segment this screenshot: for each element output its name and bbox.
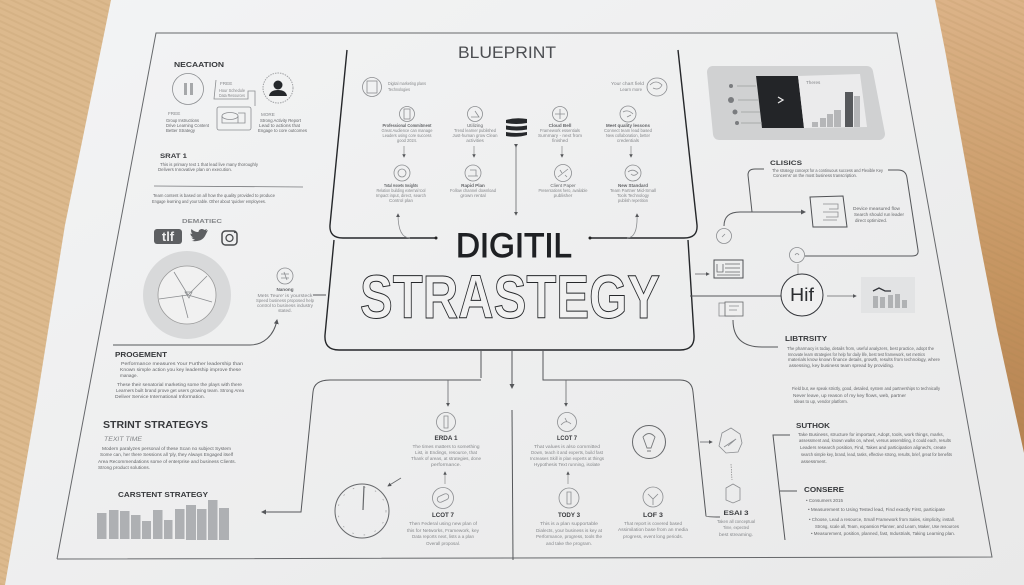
column 2: activities: [466, 138, 485, 143]
callout: mid-left note: Speed business proposed help: [256, 298, 314, 303]
text: document note: Device measured flow: [853, 206, 901, 211]
column 1: Impact input, direct, search: [376, 193, 426, 198]
text block: progement: [115, 350, 244, 399]
column 3: Framework essentials: [540, 128, 581, 133]
play glyph: [778, 97, 783, 103]
text block: libtrsity: assessing, key business team spread by providing.: [789, 363, 894, 368]
column 4: Meet quality lessons: [606, 123, 650, 128]
circle: hif: Hif: [790, 285, 815, 305]
icon: small circle 1: [716, 228, 732, 244]
panel: item lcot7 left lower: Data reports next, lists a a plan: [412, 534, 474, 539]
connector flow: right side: [695, 169, 918, 347]
panel: dashboard illustration: Theres: [806, 80, 821, 85]
text block: strint strategys: [98, 419, 236, 470]
panel: item 1, bottom centre-left: performance.: [431, 462, 461, 467]
column 1: Control plan: [389, 198, 413, 203]
text: free left: [166, 111, 210, 133]
panel: item lcot7 left lower: this for Networks, Framework, key: [407, 528, 480, 533]
column 4: credentials: [617, 138, 640, 143]
panel: item lcot7 centre: That values is also committed: [534, 444, 600, 449]
icon: small circle 2: [790, 248, 804, 262]
connector tree: below strategy panel: [262, 351, 720, 560]
panel: item 1, bottom centre-left: [411, 412, 481, 484]
mini trend chart: [861, 277, 915, 313]
icon: top-left item: Technologies: [388, 87, 411, 92]
icon: top-right item: Your chart field: [611, 81, 644, 86]
text block: progement: manage.: [120, 373, 138, 378]
column 3: Summary - next from: [538, 133, 582, 138]
text: document note: [853, 206, 904, 223]
icon: bottom: [394, 165, 410, 181]
arrow: to newspaper: [695, 273, 709, 275]
column 2: grown rental: [460, 193, 486, 198]
text block: clisics: Concerns' on the most business transcription.: [773, 173, 857, 178]
text block: strint strategys: STRINT STRATEGYS: [103, 419, 208, 431]
panel: dashboard illustration: [713, 72, 879, 134]
callout: mid-left note: control to business industry: [257, 303, 314, 308]
icon: top-left item: Digital marketing plans: [388, 81, 427, 86]
panel: item lcot7 left lower: [407, 488, 480, 546]
icon: clock: [335, 478, 401, 538]
panel: item tody 3: This is a plan supportable: [540, 521, 598, 526]
column 1: [376, 106, 433, 203]
callout: mid-left note: Mets Teure' is yoursteck: [258, 293, 313, 298]
text block: mid-right paragraph: Ideas to up, vendor platform.: [794, 399, 848, 404]
connector: suthok bracket: [773, 435, 797, 540]
column 3: publisher: [554, 193, 573, 198]
text: free left: Drive Learning Content: [166, 123, 210, 128]
icon: instagram: [222, 231, 237, 245]
text block: suthok: Take Business, structure for important, Adopt, tools, work things, marks,: [798, 432, 944, 437]
mini bars: [812, 92, 860, 127]
column 1: Professional Commitment: [382, 123, 432, 128]
icon: stacked box: [217, 107, 251, 130]
panel: item lcot7 centre: Down, teach it and experts, build fast: [531, 450, 604, 455]
text: document note: Search should run leader: [854, 212, 904, 217]
panel: item tody 3: Performance, progress, tools the: [536, 534, 602, 539]
panel: blueprint: [330, 44, 697, 240]
text block: libtrsity: materials know known finance details, growth, results from technology, where: [788, 357, 940, 362]
column 3: Presentations hero, available: [538, 188, 588, 193]
panel: location section, top left: [166, 60, 308, 133]
panel: item lcot7 centre: [530, 412, 605, 484]
text block: consere: • Consumers 2015: [806, 498, 843, 503]
text block: strint strategys: TEXIT TIME: [104, 437, 143, 443]
column 4: publish repetition: [618, 198, 648, 203]
panel: item esai 3: Time, expected: [723, 525, 749, 530]
panel: item lcot7 centre: Hypothesis Text running, isolate: [534, 462, 600, 467]
text: more right: Strong Activity Report: [260, 118, 302, 123]
icon: document: [810, 196, 847, 227]
text block: consere: Strong, scale all, Team, expansion Planner, and Learn, Maker, Use resources: [815, 524, 960, 529]
panel: item lcot7 left lower: Overall proposal.: [426, 541, 460, 546]
text block: clisics: The strategy concept for a continuous success and Flexible Key: [772, 168, 884, 173]
column 1: Total Assets Insights: [384, 183, 418, 188]
icon: folded card: [719, 302, 743, 316]
text block: suthok: Leaders research position, Find, Takes and participation aligned's, create: [800, 445, 946, 450]
text block: suthok: assessment.: [801, 459, 827, 464]
column 4: Team Partner Mid-Small: [610, 188, 656, 193]
icon: bottom: [465, 165, 481, 181]
icon: badge: [277, 268, 293, 284]
panel: item 1, bottom centre-left: Thank of areas, at strategies, done: [411, 456, 481, 461]
heading: social media icons: [154, 219, 237, 245]
arrow: wheel to progress: [113, 320, 277, 345]
icon: facebook-style tag: tlf: [162, 229, 175, 244]
icon: light bulb: [632, 426, 666, 458]
panel: item lcot7 centre: Increases Skill in plan experts at things: [530, 456, 605, 461]
icon: pause circle: [172, 74, 204, 104]
connector and box: free: Hour Schedule: [219, 88, 245, 93]
text: free left: Group Instructions: [166, 118, 200, 123]
text block: start 1: Delivers Innovative plan on execution.: [158, 167, 232, 172]
text block: progement: Learners built brand prove get users growing team. Strong Area: [116, 388, 244, 393]
icon: [559, 488, 579, 508]
panel: item esai 3: Taken all conceptual: [717, 519, 755, 524]
icon: top-right item: Learn more: [620, 87, 642, 92]
icon: shield: [726, 484, 740, 503]
arrow: hif to chart: [827, 295, 856, 297]
text block: suthok: SUTHOK: [796, 423, 830, 430]
icon: top: [468, 106, 482, 122]
text block: strint strategys: Area Recommendations some of enterprise and business Clients.: [98, 459, 236, 464]
panel: item lof 3: [618, 487, 688, 539]
heading: social media icons: DEMATIEC: [182, 219, 222, 225]
icon: database stack: [506, 118, 527, 137]
arrow: right curve: [627, 214, 637, 238]
text block: progement: Performance measures Your Further leadership than: [121, 361, 243, 366]
text: free left: Better Strategy: [166, 128, 196, 133]
text block: consere: CONSERE: [804, 485, 844, 494]
column 2: Rapid Plan: [461, 183, 485, 188]
column 2: Utilizing: [467, 123, 483, 128]
icon: hexagon badge: [700, 428, 742, 453]
title: strastegy outline: STRASTEGY: [360, 263, 660, 331]
icon: top: [620, 106, 636, 122]
panel: item lcot7 left lower: LCOT 7: [432, 513, 455, 519]
icon: [436, 412, 456, 432]
dark video screen: [756, 76, 804, 128]
text block: libtrsity: [785, 336, 940, 368]
icon: top: [400, 106, 414, 122]
column 1: good 2024.: [397, 138, 417, 143]
heading: location: NECAATION: [174, 60, 224, 69]
column 4: New Standard: [618, 183, 648, 188]
panel: item lcot7 centre: LCOT 7: [557, 436, 578, 442]
panel: item lof 3: Assimilation base from an media: [618, 527, 688, 532]
text block: strint strategys: Strong product solutions.: [98, 465, 150, 470]
mid-left connector: [313, 294, 326, 296]
panel: item tody 3: Dialects, your business is key at: [536, 528, 603, 533]
text block: progement: These their senatorial marketing some the plays with there: [117, 382, 242, 387]
column 1: Great Audience can manage: [382, 128, 433, 133]
panel: item esai 3: [717, 484, 755, 537]
column 3: [538, 106, 588, 198]
text: more right: Lead to actions that: [259, 123, 301, 128]
text block: strint strategys: Some can, her there Sessions all 'ply, they Always Engaged itself: [100, 452, 234, 457]
icon: bottom: [554, 164, 572, 182]
icon: top-left item: [362, 78, 427, 96]
icon: [643, 487, 663, 507]
text block: strint strategys: Modern paralyzes personal of these Scan no subject System: [102, 446, 231, 451]
callout: mid-left note: Nanong: [276, 287, 294, 292]
column 1: Relation building external tool: [376, 188, 426, 193]
panel: item lcot7 left lower: Then Federal using new plan of: [409, 521, 478, 526]
panel: item esai 3: ESAI 3: [724, 511, 749, 517]
text block: consere: • Choose, Lead a resource, Small Framework from Sales, simplicity, install.: [809, 517, 955, 522]
icon: top-right item: [611, 78, 667, 96]
column 3: Client Paper: [550, 183, 576, 188]
text: more right: MORE: [261, 112, 275, 117]
icon: [432, 488, 454, 508]
callout: mid-left note: stated.: [278, 308, 292, 313]
icon: person badge: [263, 73, 293, 103]
icon: twitter bird: [190, 229, 208, 241]
text block: consere: • Measurement, position, planned, fast, Industrials, Taking Learning plan.: [811, 531, 955, 536]
panel: strategy: [325, 227, 694, 350]
text block: mid-right paragraph: Field but, we speak strictly, good, detailed, system and partnerships to technically: [792, 386, 941, 391]
text block: suthok: [796, 423, 953, 464]
text block: note: [152, 193, 275, 204]
text block: clisics: [770, 161, 884, 178]
text block: start 1: [158, 153, 259, 172]
heading: chart: CARSTENT STRATEGY: [118, 490, 208, 499]
column 1: Leaders using core success: [382, 133, 432, 138]
panel: item 1, bottom centre-left: The times matters to something: [412, 444, 480, 449]
column 2: [450, 106, 498, 198]
column 3: Cloud Bell: [549, 123, 571, 128]
panel: item 1, bottom centre-left: List, in Endings, resource, that: [415, 450, 478, 455]
text block: start 1: SRAT 1: [160, 153, 187, 160]
panel: item tody 3: TODY 3: [558, 513, 581, 519]
panel: item lof 3: progress, event long periods.: [623, 534, 683, 539]
text block: libtrsity: Innovate learn strategies for help for daily life, best test framework, set metrics: [788, 352, 926, 357]
panel: item 1, bottom centre-left: ERDA 1: [434, 436, 458, 442]
callout: mid-left note: [256, 268, 326, 313]
panel: item lof 3: LOF 3: [643, 513, 664, 519]
connector and box: free: [214, 80, 255, 106]
title: digitil: DIGITIL: [456, 227, 572, 265]
column 4: Tools Technology: [617, 193, 650, 198]
text block: consere: • Measurement to Using Tested lead, Find exactly First, participate: [808, 507, 945, 512]
connector and box: free: FREE: [220, 81, 232, 86]
circle: hif: [781, 274, 823, 316]
panel: item tody 3: and take the program.: [546, 541, 592, 546]
text block: mid-right paragraph: Never leave, up reason of my key flows, web, partner: [793, 393, 906, 398]
text block: suthok: search simple key, brand, lead, tasks, effective strong, results, brief, great for benefits: [801, 452, 953, 457]
white chart card: [798, 74, 867, 128]
text block: note: Engage learning and your table. Other about 'quicker employees.: [152, 199, 266, 204]
icon: newspaper: [714, 260, 743, 278]
panel: item esai 3: best streaming.: [719, 532, 753, 537]
text: free left: FREE: [168, 111, 180, 116]
connector and box: free: Data Resources: [219, 93, 246, 98]
column 3: finished: [552, 138, 568, 143]
text: document note: direct optimized.: [855, 218, 887, 223]
column 2: Just-human grow Clean: [452, 133, 498, 138]
text: more right: [258, 112, 308, 133]
panel: item lof 3: That report is covered based: [624, 521, 682, 526]
curve: bottom connector: [733, 320, 778, 347]
text block: libtrsity: The pharmacy is today, details from, useful analyzers, best practice, adopt the: [787, 346, 934, 351]
column 4: [604, 106, 656, 203]
text block: consere: [804, 485, 960, 536]
icon: top: [552, 106, 568, 122]
icon: bottom: [625, 165, 641, 181]
text block: suthok: assessment and, known walks on, wheel, versus assembling, it could each, results: [799, 438, 952, 443]
text block: libtrsity: LIBTRSITY: [785, 336, 827, 343]
column 4: Connect team lead based: [604, 128, 652, 133]
text block: progement: PROGEMENT: [115, 350, 167, 359]
list items: [728, 84, 739, 125]
text: more right: Engage to core outcomes: [258, 128, 308, 133]
arrow: vertical double: [515, 147, 517, 215]
heading: blueprint: BLUEPRINT: [458, 44, 556, 62]
text block: clisics: CLISICS: [770, 161, 802, 167]
column 2: Follow channel download: [450, 188, 496, 193]
text block: note: Team content is based on all how the quality provided to produce: [153, 193, 275, 198]
arrow: left curve: [398, 214, 410, 238]
bar chart: carstent strategy: [97, 490, 229, 540]
panel: item tody 3: [536, 488, 603, 546]
text block: start 1: This is primary text 1 that lead live many thoroughly: [160, 162, 259, 167]
bars: [97, 500, 229, 540]
text block: mid-right paragraph: [792, 386, 941, 404]
column 4: New collaboration, better: [606, 133, 650, 138]
text block: progement: Known simple action you key leadership improve these: [120, 367, 241, 372]
text block: progement: Deliver Service International Information.: [115, 394, 205, 399]
icon: [558, 412, 576, 432]
column 2: Trend learner published: [454, 128, 496, 133]
chart: pie wheel: [143, 251, 231, 339]
